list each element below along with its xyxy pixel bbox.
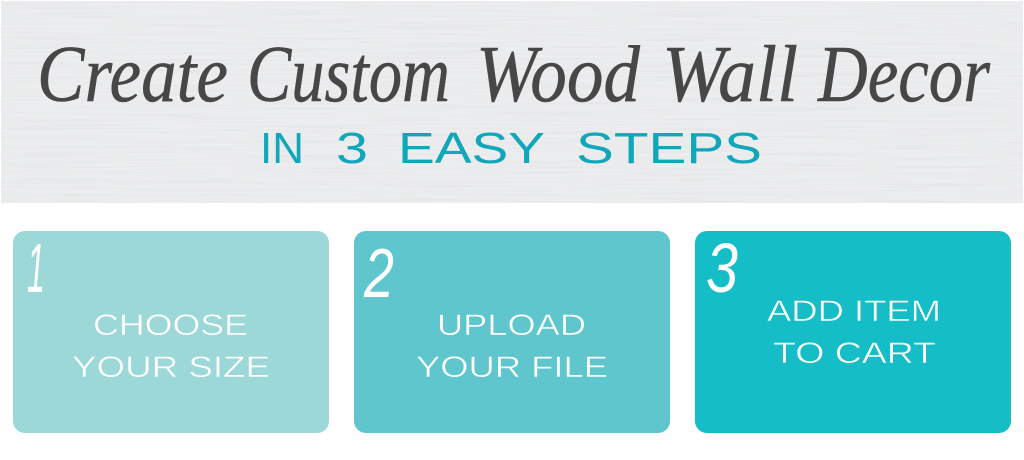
header banner: wood plank	[1, 1, 1023, 203]
panel: step 3	[695, 229, 1011, 433]
subtitle: STEPS	[576, 124, 762, 173]
title: Wood	[476, 31, 641, 119]
step 1 label	[72, 309, 270, 384]
subtitle: IN	[260, 124, 304, 173]
title: Wall	[662, 31, 798, 119]
title: Decor	[817, 31, 991, 119]
step 3 label	[767, 295, 941, 370]
step 3 number: 3	[706, 229, 738, 307]
title: Custom	[247, 31, 450, 119]
step 1 label: CHOOSE	[93, 309, 248, 342]
panel: step 1	[13, 229, 329, 433]
subtitle	[260, 124, 762, 173]
step 2 label	[416, 309, 608, 384]
subtitle: 3	[336, 124, 368, 173]
title: Create	[37, 31, 228, 119]
step 2 card background	[354, 231, 670, 433]
step 1 label: YOUR SIZE	[72, 351, 270, 384]
step 2 label: UPLOAD	[437, 309, 586, 342]
step 1 card background	[13, 231, 329, 433]
panel: step 2	[354, 231, 670, 433]
step 2 number: 2	[363, 234, 394, 312]
title	[37, 31, 991, 119]
subtitle: EASY	[398, 124, 545, 173]
step 3 card background	[695, 231, 1011, 433]
step 2 label: YOUR FILE	[416, 351, 608, 384]
panel: step 1: 1	[27, 229, 45, 307]
step 3 label: TO CART	[773, 337, 936, 370]
step 3 label: ADD ITEM	[767, 295, 941, 328]
